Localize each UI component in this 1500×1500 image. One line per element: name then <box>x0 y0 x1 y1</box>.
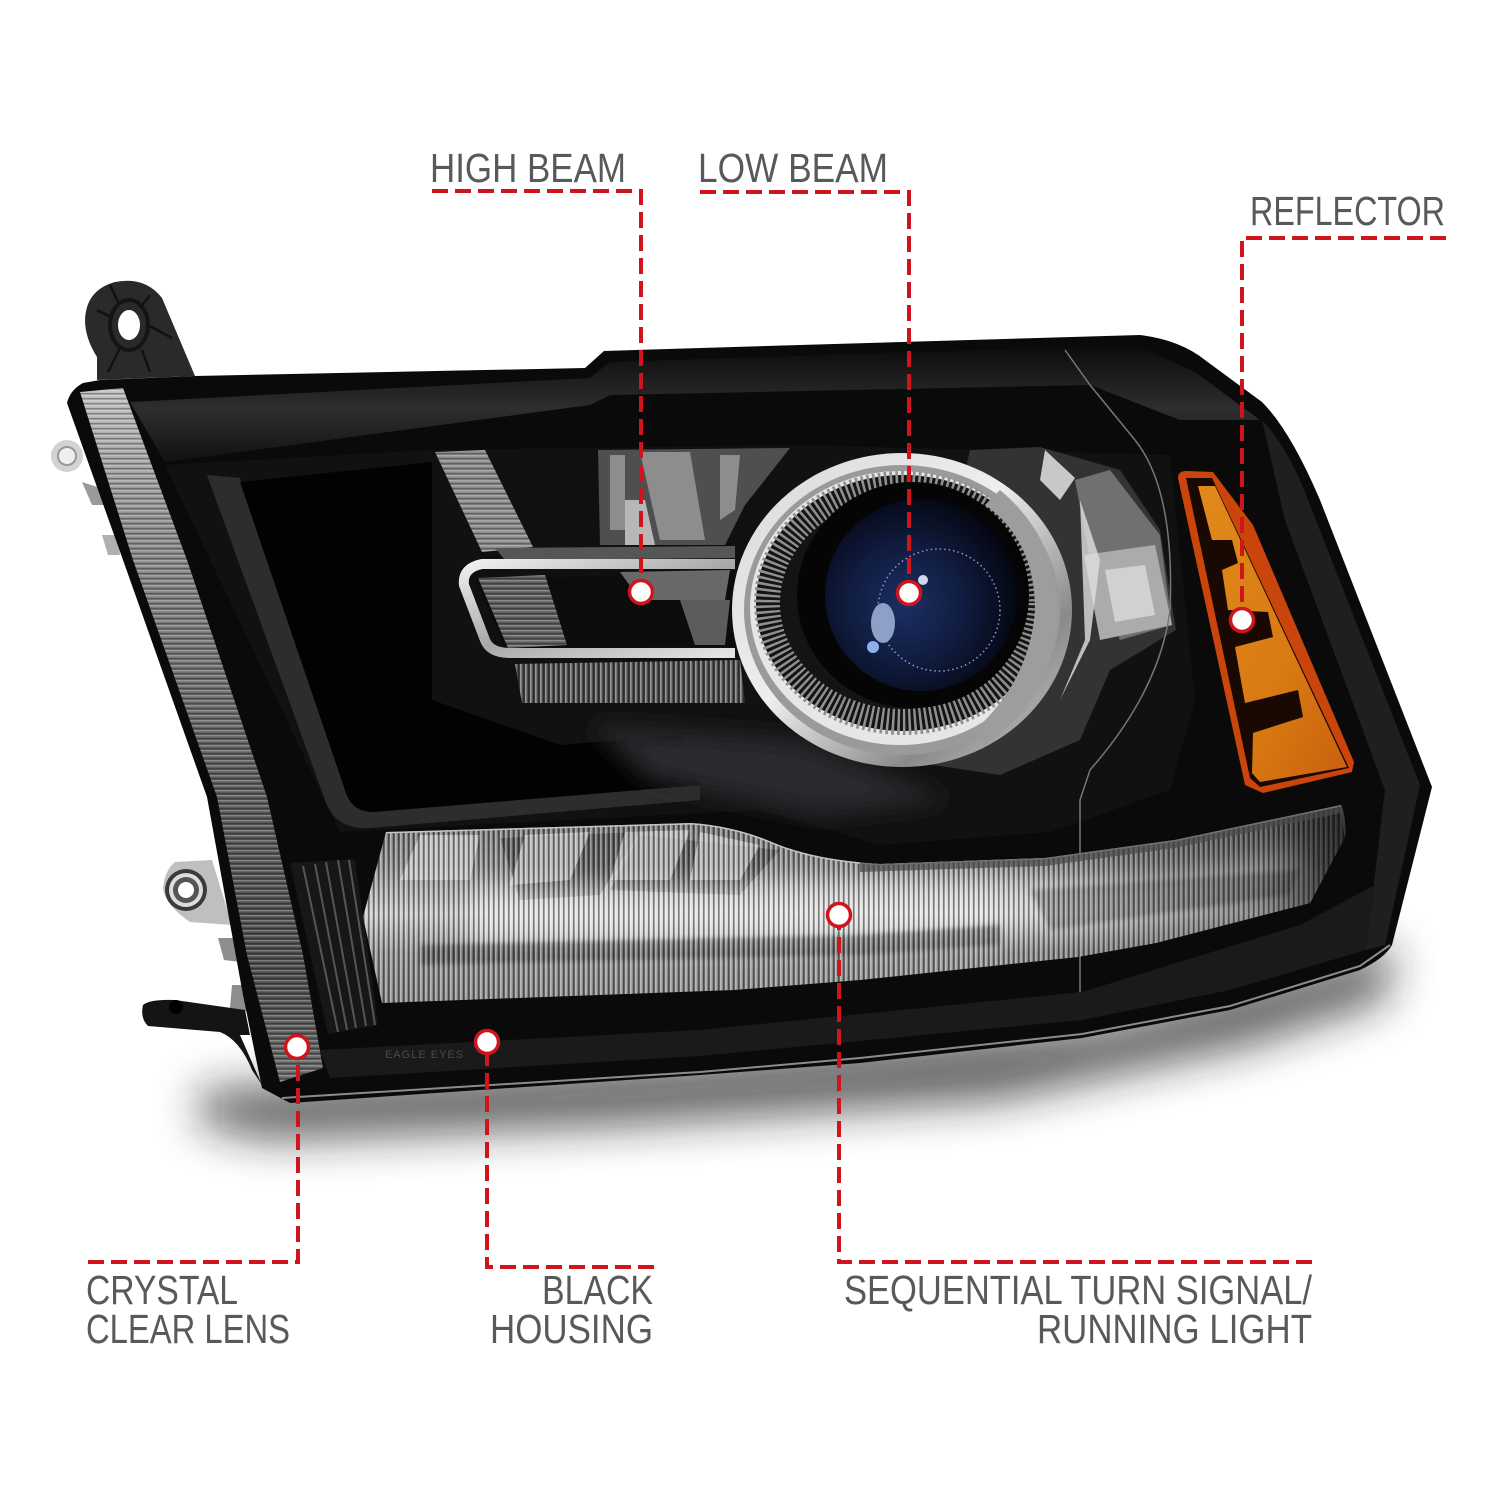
bar window contents <box>475 572 735 648</box>
reflector chamber <box>435 447 790 703</box>
black housing <box>67 335 1432 1103</box>
right edge facet <box>1262 420 1420 950</box>
lip highlight <box>282 945 1390 1098</box>
inner bezel frame <box>165 445 1195 845</box>
callout: crystal clear lens: CLEAR LENS <box>86 1306 290 1352</box>
callout: sequential turn signal: RUNNING LIGHT <box>1037 1306 1312 1352</box>
projector lens <box>825 499 1017 691</box>
callout: reflector <box>1230 188 1446 632</box>
interior black recess <box>240 462 700 812</box>
ground shadow <box>200 945 1395 1140</box>
callout: black housing <box>476 1030 654 1352</box>
cut line <box>1065 350 1171 1020</box>
chrome ring <box>732 453 1072 767</box>
top surface band <box>130 345 1260 462</box>
lower lip <box>320 885 1375 1078</box>
headlight <box>51 281 1432 1103</box>
chrome bar <box>464 564 735 653</box>
callout: crystal clear lens: CRYSTAL <box>86 1267 238 1313</box>
annotated headlight infographic <box>51 154 1446 1344</box>
frame light edge <box>207 475 700 828</box>
callout: crystal clear lens <box>86 1036 308 1352</box>
callout: high beam: HIGH BEAM <box>430 145 626 191</box>
dark fins <box>290 859 378 1034</box>
lower bracket <box>142 1000 262 1085</box>
callout: reflector: REFLECTOR <box>1250 188 1445 234</box>
callout: black housing: HOUSING <box>490 1306 653 1352</box>
mounting tab top <box>85 281 195 380</box>
callout: sequential turn signal <box>828 904 1313 1352</box>
side bolts and lugs <box>51 440 250 1012</box>
ring bright right side <box>975 490 1058 745</box>
projector housing <box>732 447 1176 775</box>
interior soft glow <box>590 725 950 815</box>
molded brand text: EAGLE EYES <box>385 1049 464 1061</box>
running light <box>360 800 1360 1010</box>
callout: low beam: LOW BEAM <box>698 145 888 191</box>
callout: black housing: BLACK <box>542 1267 653 1313</box>
callout: low beam <box>698 145 920 604</box>
inner dark <box>797 482 1029 708</box>
callout: sequential turn signal: SEQUENTIAL TURN SIGNAL/ <box>844 1267 1313 1313</box>
callout: high beam <box>430 145 652 604</box>
clear lens strip <box>80 388 323 1082</box>
amber reflector <box>1178 471 1354 793</box>
